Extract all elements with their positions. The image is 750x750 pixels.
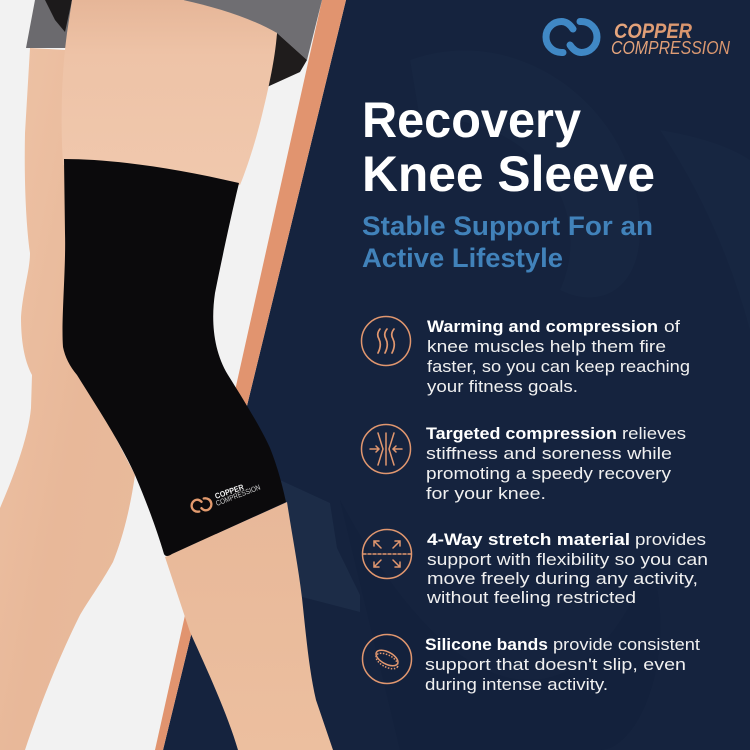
photo: leg with knee sleeve [0, 0, 333, 750]
knee sleeve [63, 159, 286, 556]
text: warming: Warming and compression [427, 317, 658, 336]
text: warming: your fitness goals. [427, 378, 578, 396]
text: stretch: support with flexibility so you can [427, 551, 708, 569]
icon: four-way stretch [362, 530, 412, 578]
sleeve logo [191, 483, 262, 513]
text: targeted: for your knee. [426, 485, 546, 503]
text: stretch: provides [635, 531, 706, 549]
navy panel [163, 0, 750, 750]
icon: silicone band [362, 634, 412, 684]
text: warming: knee muscles help them fire [427, 338, 666, 356]
text: targeted: relieves [622, 425, 686, 443]
title: Recovery [362, 92, 581, 148]
text: stretch: without feeling restricted [426, 589, 636, 607]
shorts [26, 0, 322, 87]
text: warming: faster, so you can keep reaching [427, 358, 690, 376]
text: silicone: provide consistent [553, 636, 700, 654]
text: warming: of [664, 318, 680, 336]
subtitle: Active Lifestyle [362, 243, 563, 273]
text: silicone [425, 635, 700, 694]
icon: compression [362, 424, 410, 474]
text: stretch [426, 530, 708, 607]
sleeve logo: COPPER [214, 483, 245, 501]
logo mark [546, 22, 597, 52]
sleeve logo: COMPRESSION [214, 483, 262, 508]
text: targeted: promoting a speedy recovery [426, 465, 672, 483]
text: targeted: Targeted compression [426, 424, 617, 443]
orange diagonal band [155, 0, 346, 750]
text: stretch: 4-Way stretch material [427, 530, 630, 549]
title [362, 92, 655, 202]
text: targeted: stiffness and soreness while [426, 445, 672, 463]
text: silicone: support that doesn't slip, even [425, 656, 686, 674]
text: warming [427, 317, 690, 396]
text: targeted [426, 424, 686, 503]
front thigh [62, 0, 277, 185]
logo text: COPPER [614, 20, 693, 43]
text: silicone: during intense activity. [425, 676, 608, 694]
brand logo [546, 20, 731, 58]
back leg [0, 48, 135, 750]
subtitle [362, 211, 653, 273]
text: silicone: Silicone bands [425, 635, 548, 654]
logo text [611, 20, 731, 58]
text: stretch: move freely during any activity, [427, 570, 698, 588]
subtitle: Stable Support For an [362, 211, 653, 241]
front lower leg [165, 502, 333, 750]
logo text: COMPRESSION [611, 38, 731, 58]
icon: heat waves [362, 316, 410, 366]
title: Knee Sleeve [362, 146, 655, 202]
